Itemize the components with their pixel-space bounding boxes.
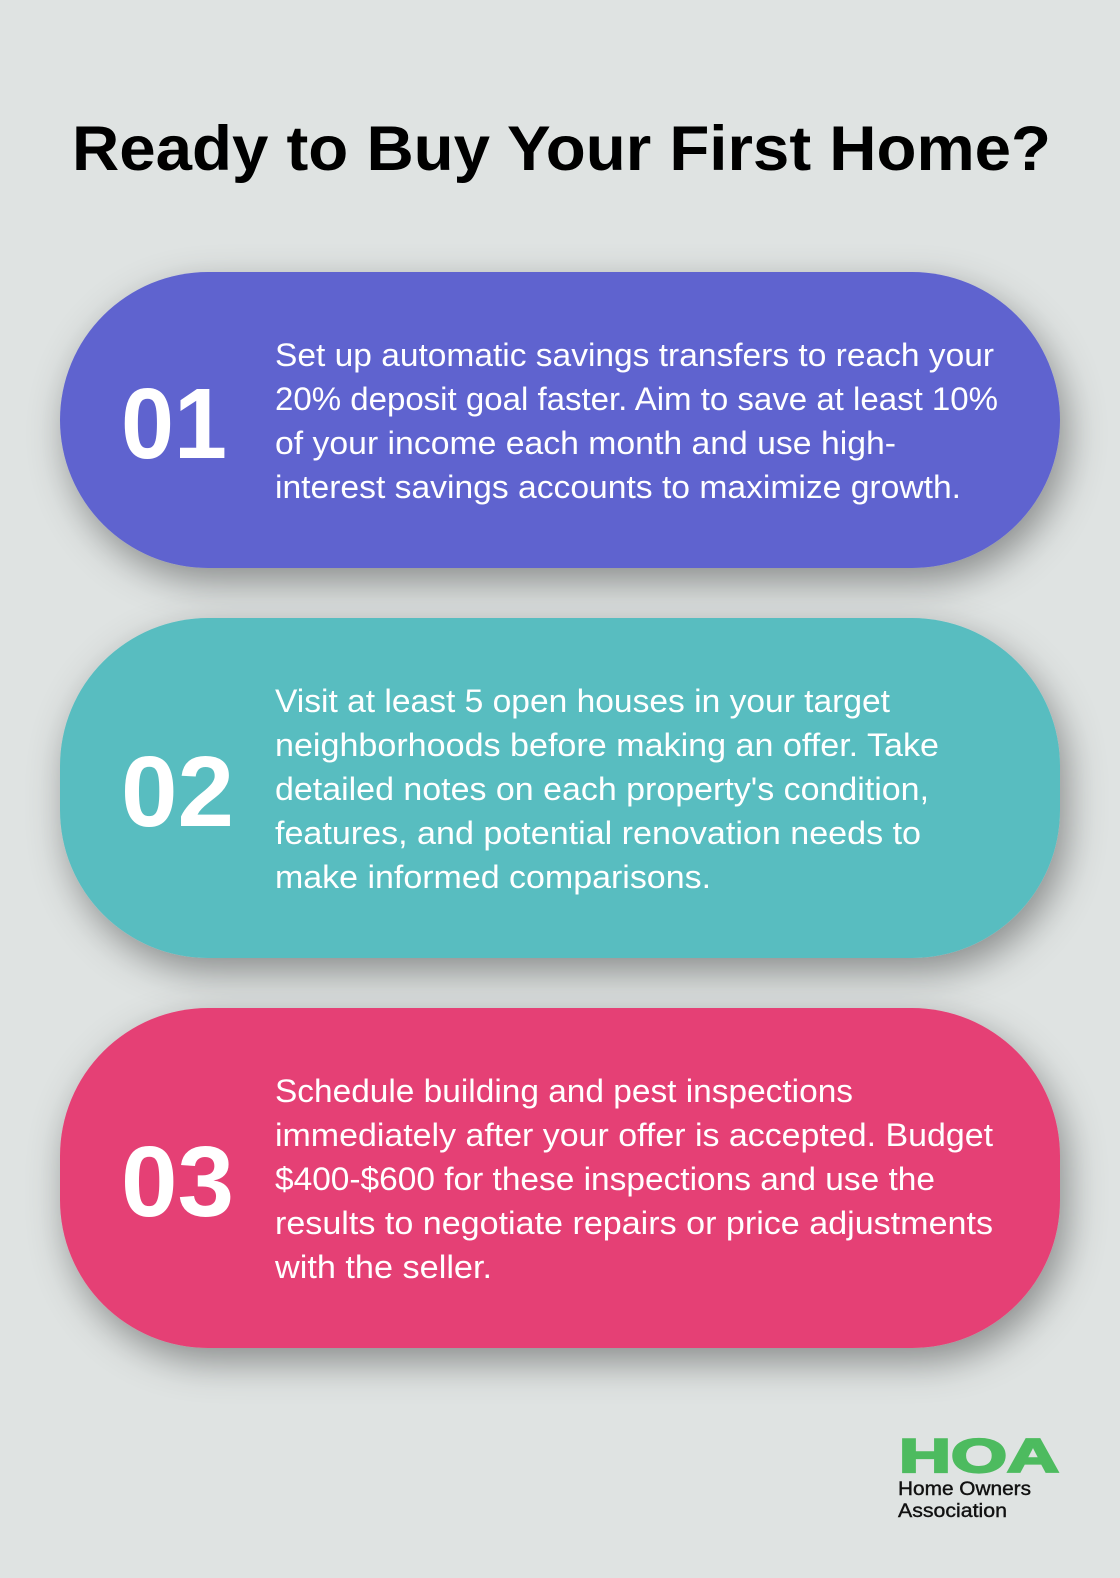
pill background: step 01: [60, 272, 1060, 568]
panel: step 02: [60, 618, 1060, 958]
pill background: step 03: [60, 1008, 1060, 1348]
text block: step 01: interest savings accounts to maximize growth.: [275, 469, 961, 505]
text block: step 02: detailed notes on each property's condition,: [275, 771, 929, 807]
logo caption: line 1: Home Owners: [898, 1478, 1031, 1500]
text block: step 02: neighborhoods before making an offer. Take: [275, 727, 939, 763]
logo mark: HOA: HOA: [899, 1429, 1059, 1482]
text block: step 01: 20% deposit goal faster. Aim to save at least 10%: [275, 381, 998, 417]
text block: step 01: of your income each month and use high-: [275, 425, 896, 461]
text block: step 03: results to negotiate repairs or price adjustments: [275, 1205, 993, 1241]
text block: step 02: make informed comparisons.: [275, 859, 711, 895]
title: Ready to Buy Your First Home?: [72, 114, 1051, 184]
text block: step 01: [275, 337, 998, 505]
text block: step 03: $400-$600 for these inspections and use the: [275, 1161, 935, 1197]
number 03: 03: [121, 1126, 234, 1238]
logo caption: line 2: Association: [898, 1500, 1007, 1522]
text block: step 02: features, and potential renovation needs to: [275, 815, 921, 851]
panel: step 03: [60, 1008, 1060, 1348]
text block: step 02: Visit at least 5 open houses in your target: [275, 683, 890, 719]
text block: step 03: Schedule building and pest inspections: [275, 1073, 853, 1109]
text block: step 03: immediately after your offer is accepted. Budget: [275, 1117, 993, 1153]
text block: step 03: with the seller.: [274, 1249, 492, 1285]
number 02: 02: [121, 736, 234, 848]
text block: step 03: [274, 1073, 993, 1285]
text block: step 02: [275, 683, 939, 895]
logo: HOA Home Owners Association: [898, 1429, 1059, 1522]
panel: step 01: [60, 272, 1060, 568]
number 01: 01: [121, 368, 227, 480]
pill background: step 02: [60, 618, 1060, 958]
text block: step 01: Set up automatic savings transfers to reach your: [275, 337, 994, 373]
